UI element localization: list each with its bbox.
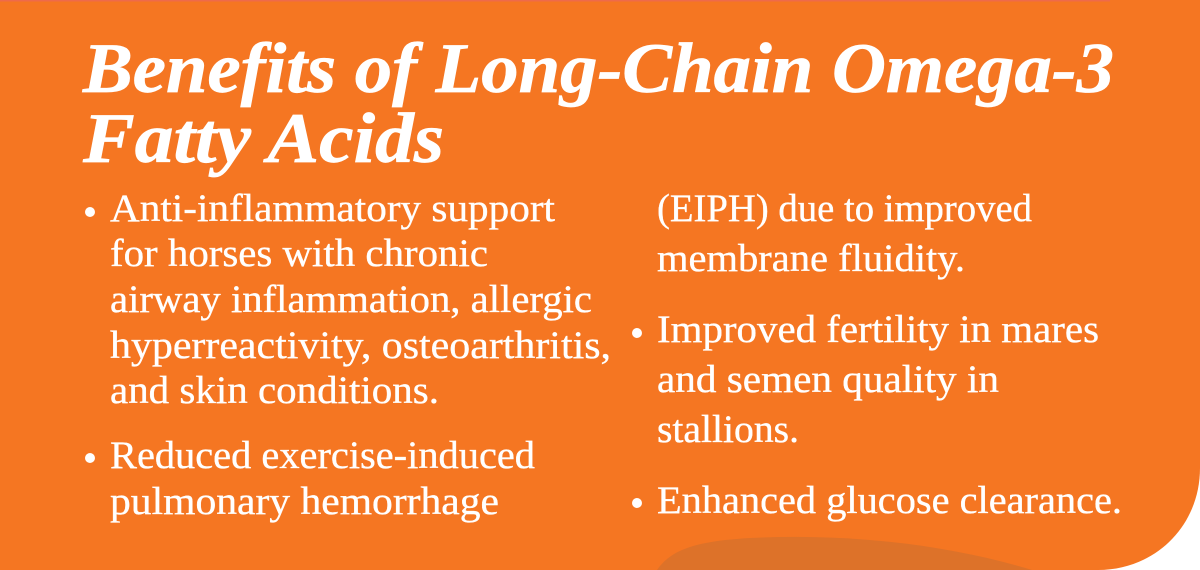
bullet item: anti-inflammatory support: hyperreactivity, osteoarthritis,: [110, 324, 611, 367]
bullet item: reduced EIPH: pulmonary hemorrhage: [110, 480, 499, 523]
top accent line: [0, 0, 1110, 2]
bullet item: anti-inflammatory support: and skin conditions.: [110, 369, 439, 412]
bullet item: reduced EIPH: Reduced exercise-induced: [110, 434, 536, 477]
bullet item: fertility: Improved fertility in mares: [657, 308, 1099, 351]
decorative darker curved shape: [657, 537, 1032, 570]
bullet item: reduced EIPH: [85, 434, 536, 523]
bullet item: anti-inflammatory support: for horses with chronic: [110, 232, 488, 275]
bullet item: fertility: stallions.: [657, 408, 799, 451]
bullet item: anti-inflammatory support: Anti-inflammatory support: [110, 187, 555, 230]
bullet item: glucose clearance: Enhanced glucose clearance.: [657, 479, 1122, 522]
bullet item: anti-inflammatory support: airway inflammation, allergic: [110, 278, 592, 321]
bullet item: anti-inflammatory support: [85, 187, 611, 412]
title: [82, 30, 1114, 178]
bullet item: fertility: [632, 308, 1099, 451]
title: Fatty Acids: [82, 100, 444, 178]
continued text: EIPH: membrane fluidity.: [657, 237, 965, 280]
bullet item: fertility: and semen quality in: [657, 358, 999, 401]
continued text: EIPH: (EIPH) due to improved: [657, 187, 1032, 230]
continued text: EIPH: [657, 187, 1032, 280]
title: Benefits of Long-Chain Omega-3: [82, 30, 1114, 108]
bullet list: left column: [85, 187, 611, 523]
bullet list: right column: [632, 187, 1122, 522]
